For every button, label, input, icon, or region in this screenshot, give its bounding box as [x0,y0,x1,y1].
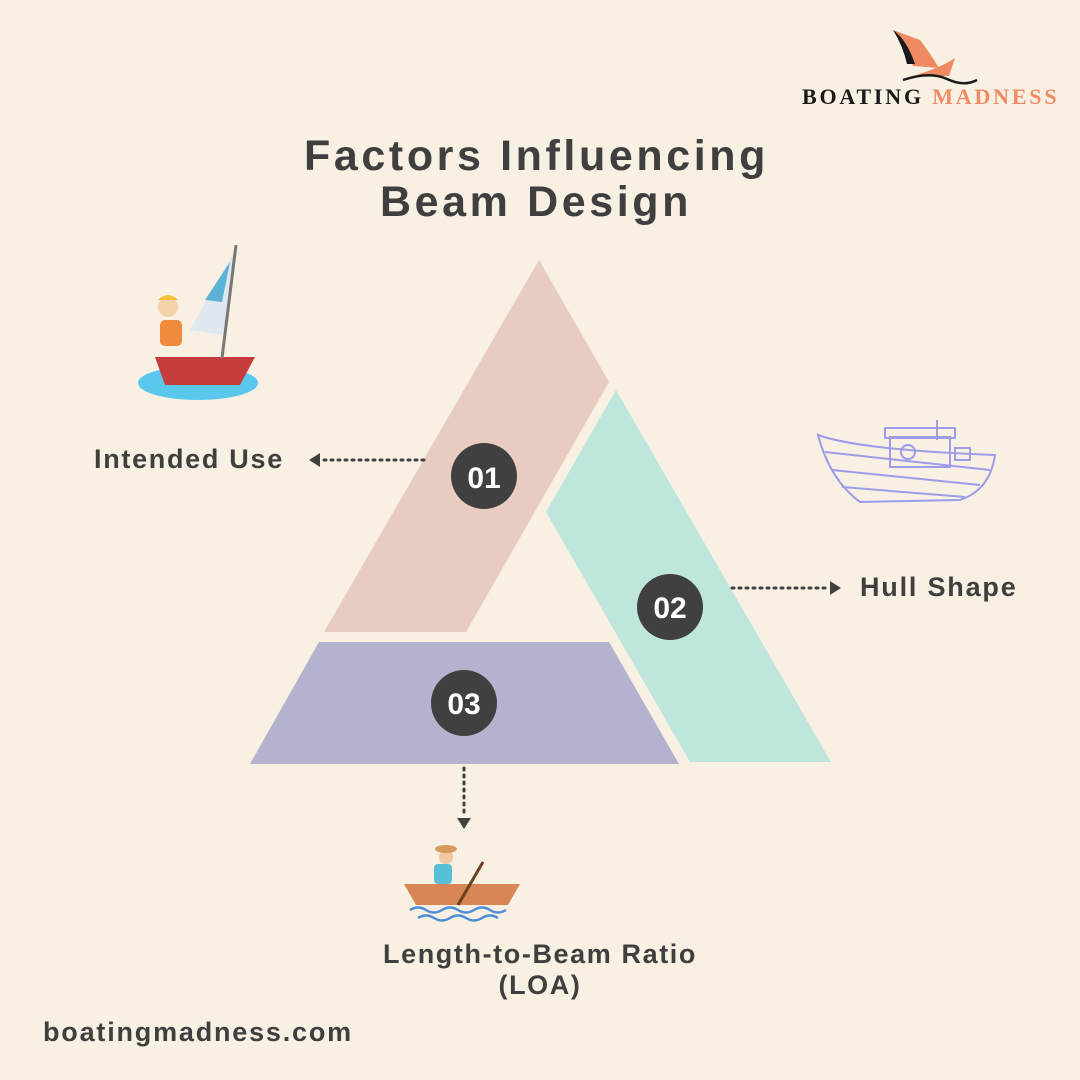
label: intended use: Intended Use [94,444,284,474]
segment 03: 03 [447,688,481,721]
segment 02 [546,390,831,762]
arrow: LOA [457,768,471,829]
icon: hull boat sketch [818,420,995,502]
label: hull shape: Hull Shape [860,572,1018,602]
segment 02: 02 [653,592,687,625]
segment 03 [250,642,679,764]
segment 01: 01 [467,462,501,495]
title: Beam Design [380,178,692,226]
title: Factors Influencing [304,132,769,180]
arrow: intended use [309,453,424,467]
icon: sailboat kid [138,245,258,400]
logo [802,30,1059,109]
icon: logo sail [893,30,978,84]
icon: rowing boat [404,845,520,920]
label: LOA: (LOA) [498,970,581,1000]
logo text: BOATING MADNESS [802,84,1059,109]
label: LOA: Length-to-Beam Ratio [383,939,697,969]
footer url: boatingmadness.com [43,1017,353,1047]
title [304,132,769,226]
label: LOA [383,939,697,1000]
segment 01 [324,260,609,632]
arrow: hull shape [732,581,841,595]
